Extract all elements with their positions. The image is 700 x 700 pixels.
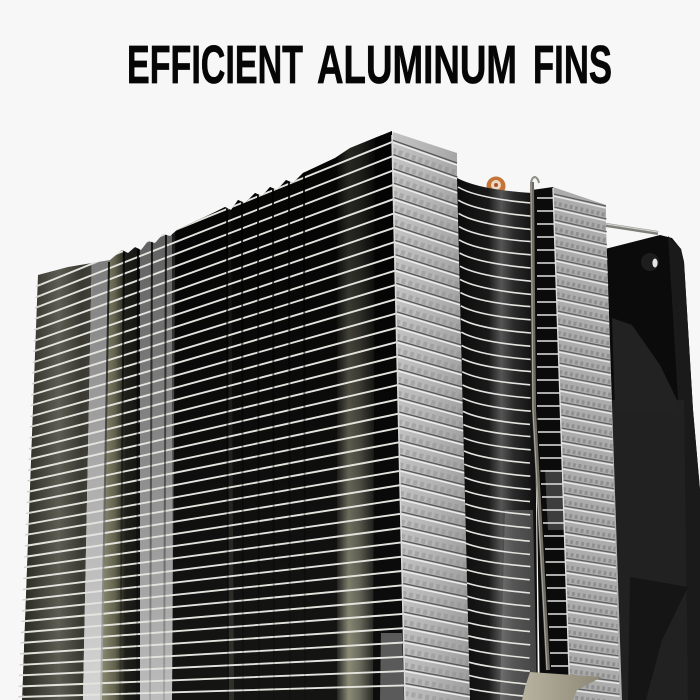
- black central column: [172, 130, 337, 700]
- lower gray patch: [380, 633, 404, 700]
- ridge edge: [392, 135, 405, 700]
- top shading: [172, 131, 394, 612]
- fan blade upper: [612, 318, 677, 412]
- mounting hole: [641, 253, 659, 271]
- silver face A texture and fin edges: [392, 140, 470, 700]
- light strip column: [83, 250, 110, 700]
- olive vertical stripe: [228, 200, 234, 700]
- olive lit column: [337, 130, 376, 700]
- fan housing lower panel: [612, 400, 688, 700]
- main fin edges on dark face: [18, 142, 404, 697]
- silver face B ridge edge: [553, 188, 570, 700]
- title: EFFICIENT: [127, 35, 303, 95]
- black ridge column: [373, 131, 404, 700]
- fin stack main dark face: [18, 120, 410, 700]
- fin tips on left edge: [18, 284, 42, 697]
- retention clip bracket: [522, 672, 602, 700]
- silver face B background: [553, 187, 622, 700]
- title: [127, 35, 612, 95]
- gray column: [140, 220, 176, 700]
- title: ALUMINUM: [317, 35, 517, 95]
- title: FINS: [533, 35, 612, 95]
- silver face B texture and fin edges: [554, 194, 620, 700]
- olive column: [102, 230, 140, 700]
- fan blade shadow: [628, 577, 688, 700]
- heatpipe copper tip: [486, 176, 506, 196]
- mounting hole highlight: [652, 258, 658, 268]
- stub fin column behind rod: [532, 187, 570, 700]
- curved dark fin column: [457, 178, 538, 700]
- left column: [22, 250, 92, 700]
- retention clip rod: [531, 177, 548, 670]
- silver face A background: [393, 132, 471, 700]
- fan frame: [605, 235, 700, 700]
- fin stepped column breaks: [100, 171, 306, 700]
- fan outer edge strip: [668, 236, 700, 700]
- fan: [605, 235, 700, 700]
- metal bar to fan: [606, 224, 658, 233]
